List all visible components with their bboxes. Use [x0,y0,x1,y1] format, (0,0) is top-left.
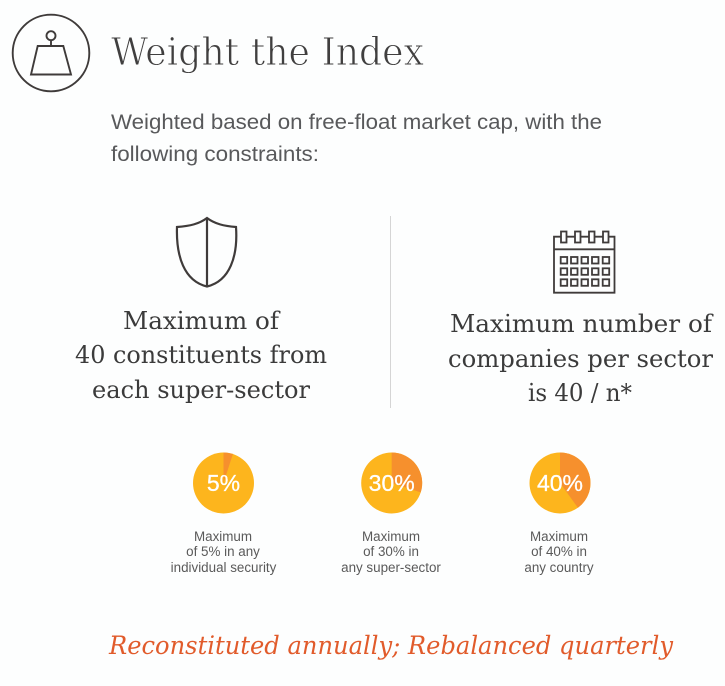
constraint: super-sector maximum: Maximum of [123,307,281,335]
caption: 5% security: individual security [171,560,277,575]
divider [390,216,391,408]
constraint: companies per sector: is 40 / n* [528,379,632,407]
caption: 40% country: Maximum [530,529,588,544]
caption: 30% super-sector: Maximum [362,529,420,544]
caption: 40% country: of 40% in [531,544,587,559]
caption: 40% country [524,529,594,575]
pie chart: 5%: 5% [207,470,240,496]
constraint: super-sector maximum: each super-sector [92,376,311,404]
constraint: companies per sector: Maximum number of [450,310,714,338]
pie chart: 40%: 40% [537,470,583,496]
pie chart: 30% [361,452,422,514]
icon: weight in circle [13,15,89,91]
constraint: companies per sector [448,310,714,407]
icon: calendar [554,232,614,293]
caption: 40% country: any country [524,560,594,575]
caption: 30% super-sector [341,529,441,575]
icon: shield [177,218,236,286]
intro text: Weighted based on free-float market cap, with the [111,111,602,134]
constraint: super-sector maximum [75,307,327,404]
caption: 5% security: Maximum [194,529,252,544]
intro text [111,111,602,166]
title: Weight the Index [111,30,424,74]
caption: 5% security: of 5% in any [186,544,260,559]
caption: 5% security [171,529,277,575]
pie chart: 40% [530,452,591,514]
caption: 30% super-sector: any super-sector [341,560,441,575]
pie chart: 30%: 30% [369,470,415,496]
footer note: Reconstituted annually; Rebalanced quarterly [108,631,674,660]
constraint: companies per sector: companies per sector [448,345,714,373]
constraint: super-sector maximum: 40 constituents from [75,341,327,369]
pie chart: 5% [193,452,254,514]
intro text: following constraints: [111,143,319,166]
caption: 30% super-sector: of 30% in [363,544,419,559]
